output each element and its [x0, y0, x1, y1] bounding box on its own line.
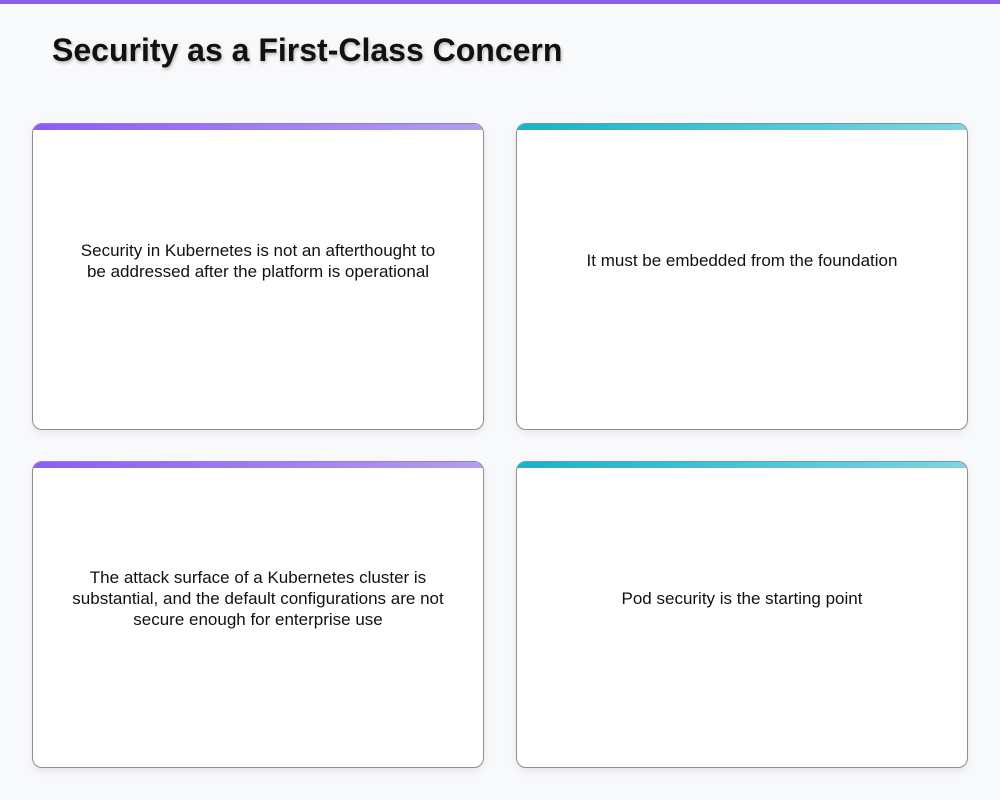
text: foundation: It must be embedded from the foundation — [587, 251, 897, 270]
text: afterthought: Security in Kubernetes is not an afterthought to be addressed after the platform is operational — [81, 240, 435, 280]
text: attack surface: The attack surface of a Kubernetes cluster is substantial, and the default configurations are not secure enough for enterprise use — [72, 568, 444, 629]
panel: afterthought — [32, 123, 484, 430]
panel: pod security — [516, 461, 968, 768]
panel: attack surface — [32, 461, 484, 768]
text: pod security: Pod security is the starting point — [622, 589, 862, 608]
top accent bar — [0, 0, 1000, 4]
title: Security as a First-Class Concern — [52, 32, 562, 68]
panel: foundation — [516, 123, 968, 430]
